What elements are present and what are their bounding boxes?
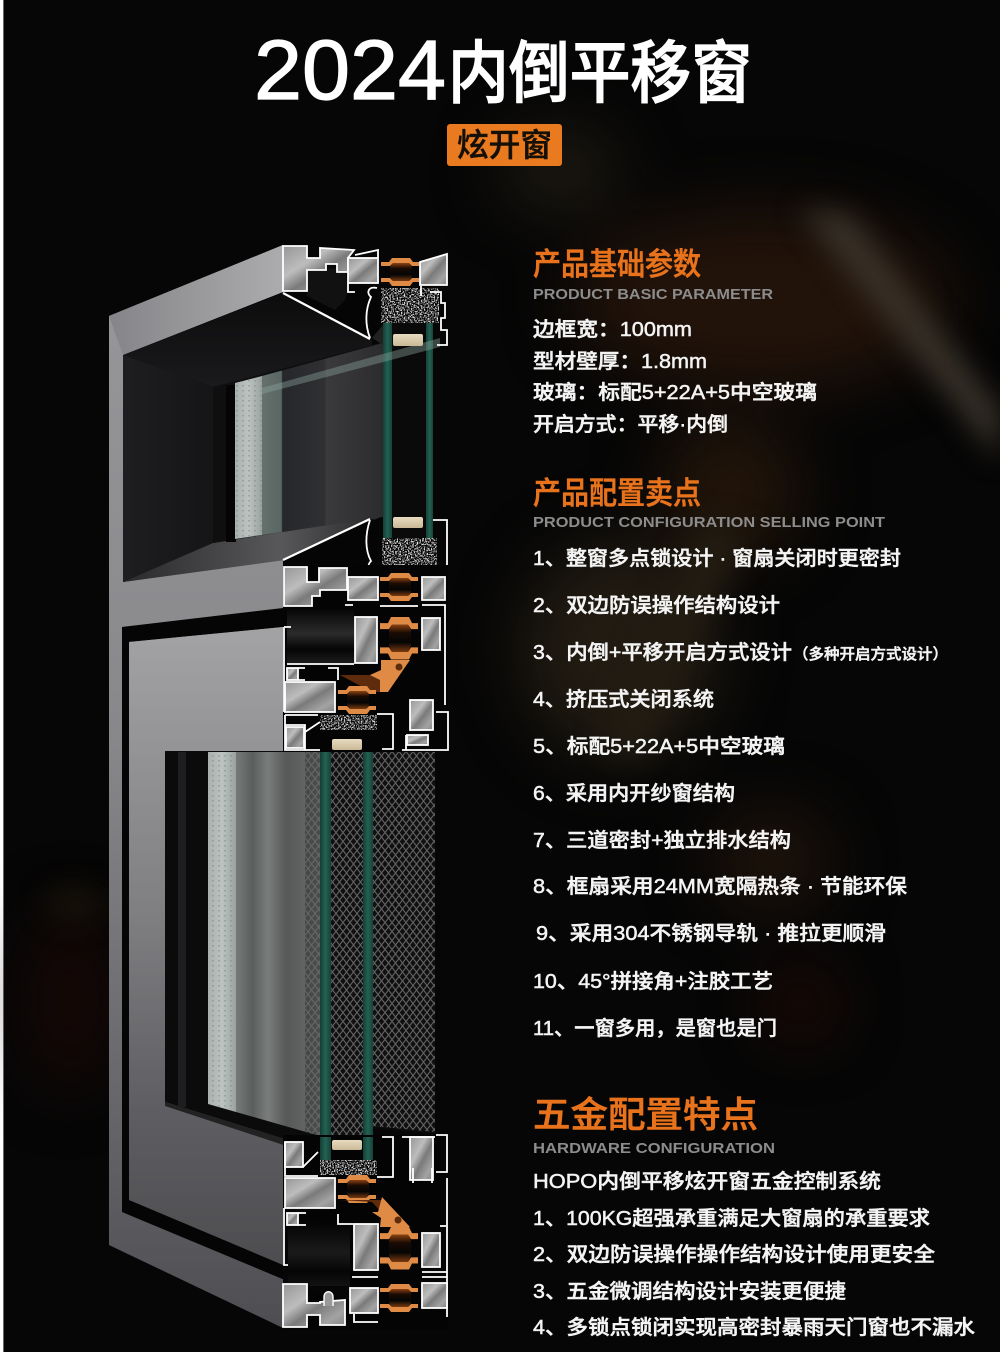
hardware list <box>533 1170 975 1339</box>
hardware list: 4、多锁点锁闭实现高密封暴雨天门窗也不漏水 <box>533 1316 975 1339</box>
panel: hardware configuration <box>533 1094 975 1339</box>
selling point list: 3、内倒+平移开启方式设计 <box>533 641 792 664</box>
lower window recess <box>165 751 435 1157</box>
subheading: HARDWARE CONFIGURATION <box>533 1140 775 1157</box>
heading: selling points: 产品配置卖点 <box>533 476 701 511</box>
upper frame outer face <box>109 245 283 1328</box>
selling point list: 10、45°拼接角+注胶工艺 <box>533 970 773 993</box>
subheading: PRODUCT BASIC PARAMETER <box>533 286 773 303</box>
title <box>254 23 752 117</box>
selling point list: 1、整窗多点锁设计 · 窗扇关闭时更密封 <box>533 547 901 570</box>
selling point list: 5、标配5+22A+5中空玻璃 <box>533 735 785 758</box>
selling point list: （多种开启方式设计） <box>793 645 948 663</box>
upper window recess <box>123 293 385 582</box>
lower glass panes <box>320 730 373 1162</box>
heading: basic parameters: 产品基础参数 <box>533 247 701 282</box>
window cross-section illustration <box>109 245 448 1330</box>
profile section: upper sash bottom and frame head <box>283 517 448 752</box>
profile section: top <box>283 246 447 346</box>
selling point list: 4、挤压式关闭系统 <box>533 688 714 711</box>
title: 内倒平移窗 <box>448 36 752 112</box>
selling point list: 2、双边防误操作结构设计 <box>533 594 780 617</box>
parameter list: 边框宽：100mm <box>533 318 692 341</box>
hardware list: 1、100KG超强承重满足大窗扇的承重要求 <box>533 1207 930 1230</box>
parameter list: 开启方式：平移·内倒 <box>533 413 728 436</box>
profile section: sash sill and bottom frame <box>283 1135 448 1330</box>
title: 2024 <box>254 23 446 117</box>
selling point list: 8、框扇采用24MM宽隔热条 · 节能环保 <box>533 875 907 898</box>
heading: hardware: 五金配置特点 <box>533 1094 758 1135</box>
hardware list: 3、五金微调结构设计安装更便捷 <box>533 1280 846 1303</box>
parameter list <box>533 318 817 436</box>
panel: product basic parameters <box>533 247 817 436</box>
upper glass panes <box>262 322 440 538</box>
parameter list: 玻璃：标配5+22A+5中空玻璃 <box>533 381 817 404</box>
selling point list <box>533 547 948 1040</box>
parameter list: 型材壁厚：1.8mm <box>533 350 707 373</box>
selling point list: 6、采用内开纱窗结构 <box>533 782 735 805</box>
selling point list: 9、采用304不锈钢导轨 · 推拉更顺滑 <box>536 922 886 945</box>
panel: product configuration selling points <box>533 476 948 1040</box>
subheading: PRODUCT CONFIGURATION SELLING POINT <box>533 514 885 531</box>
selling point list: 7、三道密封+独立排水结构 <box>533 829 791 852</box>
hardware list: 2、双边防误操作操作结构设计使用更安全 <box>533 1243 935 1266</box>
upper frame top face <box>109 245 283 355</box>
sash black reveal band <box>122 608 353 1283</box>
selling point list: 11、一窗多用，是窗也是门 <box>533 1017 777 1040</box>
hardware list: HOPO内倒平移炫开窗五金控制系统 <box>533 1170 881 1193</box>
badge: 炫开窗: 炫开窗 <box>457 127 552 163</box>
profile section: sash head <box>284 609 448 750</box>
sash face panel <box>129 627 283 1265</box>
